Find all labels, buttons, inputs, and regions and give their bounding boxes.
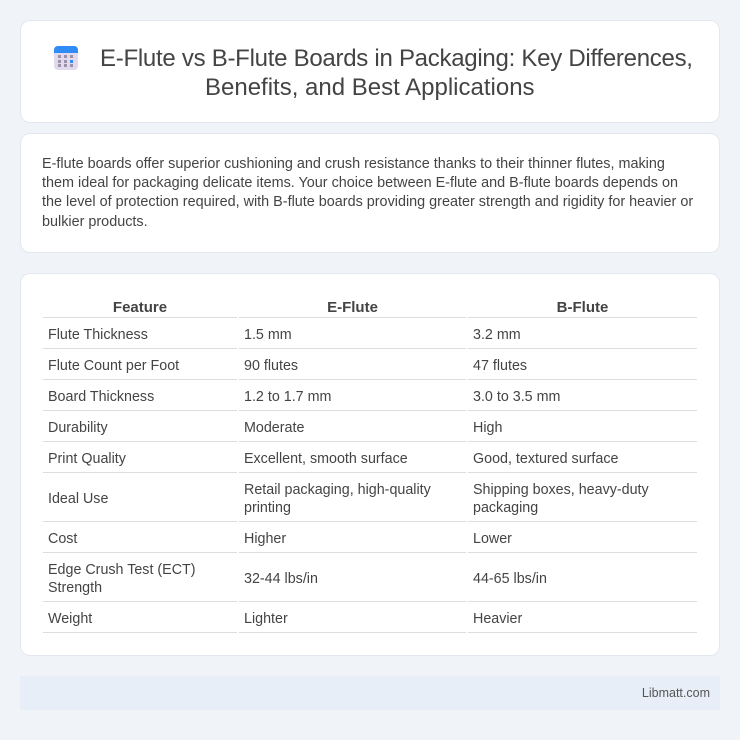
table header: Flute Thickness [48,327,148,343]
table header: Cost [48,531,77,547]
table header: 90 flutes [244,358,298,374]
table header [43,298,697,633]
icon: calendar [54,46,78,70]
table header: Heavier [473,611,522,627]
table header: Retail packaging, high-quality printing [244,482,431,516]
table header: Moderate [244,420,304,436]
title: Benefits, and Best Applications [205,74,535,101]
table header: E-Flute [327,298,378,316]
intro paragraph: them ideal for packaging delicate items. Your choice between E-flute and B-flute boards depends on [42,175,678,191]
table header: 44-65 lbs/in [473,571,547,587]
table header: 47 flutes [473,358,527,374]
comparison table [43,298,697,633]
table header: 3.0 to 3.5 mm [473,389,560,405]
table header: Feature [113,298,167,316]
panel: comparison table [20,273,720,656]
intro paragraph: the level of protection required, with B-flute boards providing greater strength and rigidity for heavier or [42,194,693,210]
table header: Print Quality [48,451,126,467]
intro paragraph: bulkier products. [42,214,148,230]
table header: Lighter [244,611,288,627]
table header: Durability [48,420,108,436]
table header: Ideal Use [48,491,108,507]
table header: Board Thickness [48,389,154,405]
table header: 1.5 mm [244,327,292,343]
footer brand: Libmatt.com [642,686,710,700]
panel: title card [20,20,720,123]
table header: Flute Count per Foot [48,358,179,374]
table header: B-Flute [557,298,608,316]
title [100,45,693,101]
table header: Good, textured surface [473,451,618,467]
table header: High [473,420,502,436]
table header: Lower [473,531,512,547]
panel: intro text [20,133,720,253]
table header: 3.2 mm [473,327,521,343]
table header: 32-44 lbs/in [244,571,318,587]
footer bar [20,676,720,710]
table header: 1.2 to 1.7 mm [244,389,331,405]
table header: Shipping boxes, heavy-duty packaging [473,482,649,516]
table header: Higher [244,531,286,547]
title: E-Flute vs B-Flute Boards in Packaging: Key Differences, [100,45,693,72]
intro paragraph: E-flute boards offer superior cushioning and crush resistance thanks to their thinner flutes, making [42,156,665,172]
table header: Weight [48,611,92,627]
intro paragraph [42,156,693,230]
table header: Edge Crush Test (ECT) Strength [48,562,196,596]
table header: Excellent, smooth surface [244,451,408,467]
